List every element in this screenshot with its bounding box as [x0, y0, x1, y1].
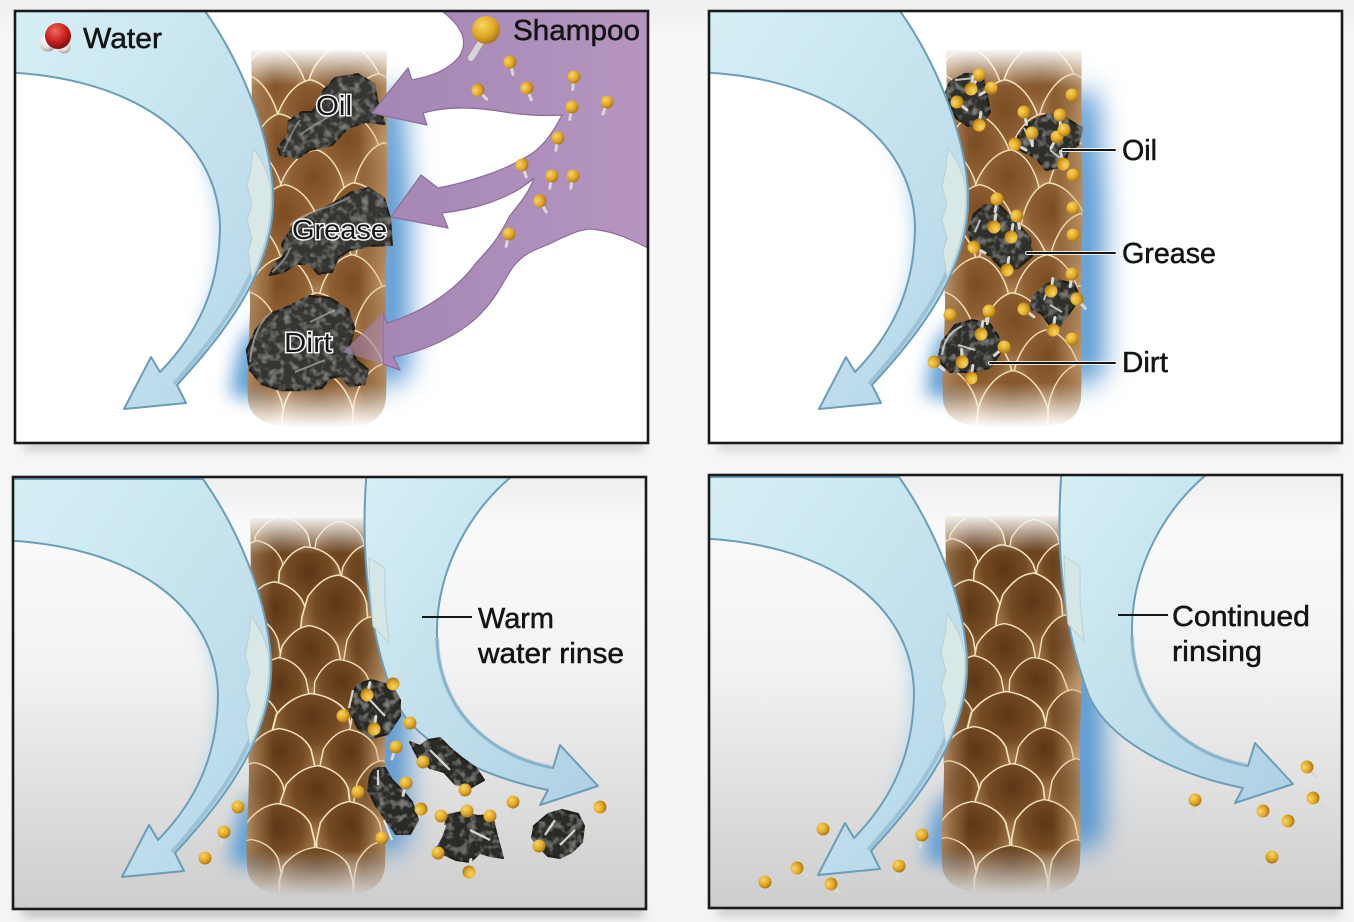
panel background: [13, 477, 646, 909]
label: warm water rinse: [478, 608, 623, 664]
label: continued rinsing: Continued: [1172, 601, 1310, 633]
right water arrow: [365, 468, 598, 805]
label: dirt: Dirt: [284, 327, 332, 358]
label: continued rinsing: rinsing: [1172, 636, 1262, 668]
panel shadow: [718, 442, 1338, 450]
hair strand: [942, 50, 1083, 426]
panel frame: [13, 477, 646, 909]
hair strand: [246, 518, 386, 894]
label: oil: Oil: [316, 90, 352, 121]
panel background: [15, 11, 648, 443]
label: shampoo: Shampoo: [513, 15, 640, 47]
panel background: [709, 475, 1342, 908]
water arrow: [0, 11, 273, 409]
left water arrow: [0, 479, 271, 877]
leader line: [422, 616, 472, 618]
artwork: [0, 11, 648, 457]
label: grease: Grease: [1122, 238, 1216, 270]
shampoo molecules: [926, 67, 1091, 386]
grease blob: [270, 188, 392, 275]
label: warm water rinse: water rinse: [477, 638, 624, 670]
panel: continued rinsing: [694, 466, 1342, 918]
left water arrow: [694, 477, 967, 875]
right water arrow: [1060, 466, 1293, 803]
water arrow: [695, 11, 968, 409]
hair strand: [247, 50, 388, 426]
label: continued rinsing: [1172, 601, 1310, 668]
panel shadow: [22, 908, 644, 916]
soil highlights: [349, 690, 575, 846]
panel shadow: [24, 442, 644, 450]
artwork: [14, 478, 623, 894]
shampoo molecules: [198, 671, 614, 880]
soil blobs: [350, 680, 584, 862]
label: grease: Grease: [292, 214, 387, 245]
label: water: Water: [83, 23, 162, 55]
artwork: [710, 12, 1215, 426]
panel: shampoo applied to hair: [0, 11, 648, 457]
soil blobs: [938, 74, 1082, 372]
oil blob: [278, 74, 385, 158]
shampoo arrows: [343, 11, 648, 370]
dirt blob: [247, 296, 368, 390]
panel background: [709, 11, 1342, 443]
panel frame: [709, 11, 1342, 443]
panel: warm water rinse: [0, 468, 646, 920]
label: warm water rinse: Warm: [478, 603, 554, 635]
panel shadow: [718, 907, 1340, 915]
icon: water molecule: [40, 23, 71, 54]
shampoo molecules: [758, 758, 1326, 896]
shampoo molecules: [469, 16, 614, 247]
panel frame: [709, 475, 1342, 908]
panel: shampoo surrounds oil, grease and dirt: [695, 11, 1342, 457]
leader lines: [990, 150, 1115, 363]
soil highlights: [942, 78, 1062, 355]
label: oil: Oil: [1122, 135, 1157, 167]
hair strand: [941, 516, 1082, 892]
leader line: [1118, 614, 1168, 616]
artwork: [710, 476, 1320, 895]
panel frame: [15, 11, 648, 443]
label: dirt: Dirt: [1122, 347, 1168, 379]
